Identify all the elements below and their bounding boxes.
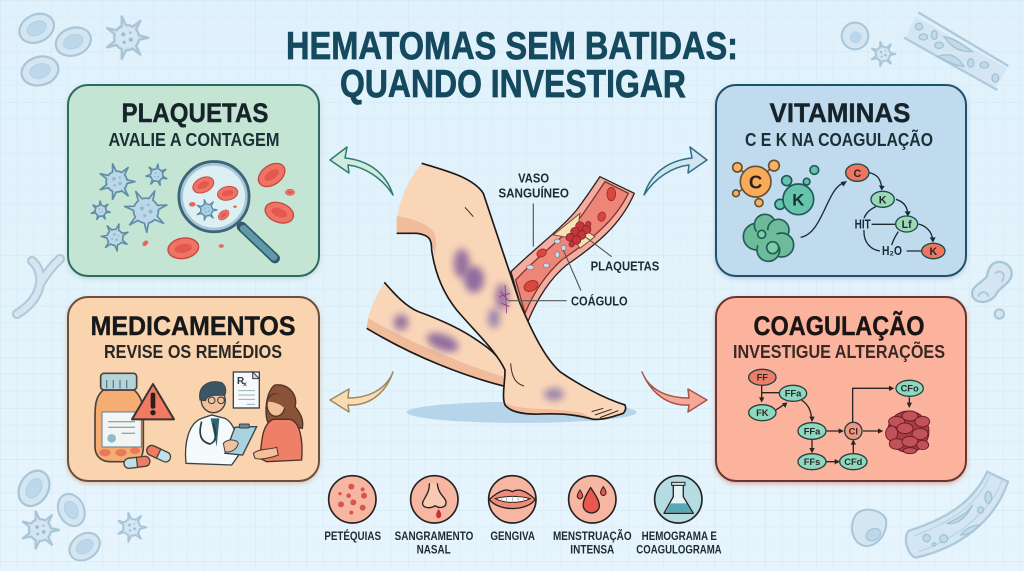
decoration: top-left blood cells (15, 8, 148, 90)
subheading: c e k na coagulacao: C E K NA COAGULAÇÃO (745, 129, 933, 150)
icon: doctor and patient: R (237, 376, 244, 387)
arrow: to medicamentos (330, 372, 393, 412)
back leg (367, 282, 505, 386)
blood vessel (511, 177, 634, 322)
decoration: right cell (972, 262, 1012, 319)
labels: symptoms: NASAL (417, 542, 451, 556)
label: plaquetas: PLAQUETAS (591, 259, 659, 273)
chart: vitamin molecules and pathway: K (879, 194, 887, 206)
panel: plaquetas (68, 85, 319, 278)
chart: coagulation cascade: FF (757, 373, 768, 383)
decoration: left branching vessel (17, 259, 60, 314)
heading: coagulacao: COAGULAÇÃO (754, 310, 924, 341)
labels: symptoms: COAGULOGRAMA (636, 542, 722, 556)
chart: vitamin molecules and pathway: H₂O (882, 244, 902, 258)
subheading: revise os remedios: REVISE OS REMÉDIOS (104, 341, 282, 362)
chart: coagulation cascade (749, 369, 930, 470)
title: QUANDO INVESTIGAR (340, 63, 686, 106)
icon: petequias (329, 476, 376, 523)
labels: symptoms: PETÉQUIAS (324, 528, 381, 543)
chart: vitamin molecules and pathway: C (853, 168, 861, 180)
title (286, 25, 738, 106)
heading: vitaminas: VITAMINAS (770, 98, 910, 128)
icon: gengiva (489, 476, 536, 523)
label: coagulo: COÁGULO (571, 294, 628, 309)
icon: platelets and magnifying glass (91, 159, 296, 261)
heading: plaquetas: PLAQUETAS (122, 98, 268, 128)
symptom icons row (324, 476, 722, 556)
labels: symptoms: MENSTRUAÇÃO (553, 528, 632, 543)
icon: sangramento nasal (411, 476, 458, 523)
title: HEMATOMAS SEM BATIDAS: (286, 25, 738, 68)
icon: doctor and patient: x (243, 381, 247, 388)
chart: vitamin molecules and pathway: K (929, 246, 937, 258)
icon: exame flask (655, 476, 702, 523)
subheading: investigue alteracoes: INVESTIGUE ALTERAÇÕES (733, 341, 945, 362)
chart: vitamin molecules and pathway: HIT (855, 218, 871, 232)
callout lines (508, 203, 612, 301)
decoration: bottom-left cells (12, 465, 146, 566)
panel: coagulacao (716, 297, 966, 483)
front leg (396, 163, 626, 419)
chart: vitamin molecules and pathway: K (792, 190, 804, 209)
labels: symptoms: INTENSA (570, 542, 614, 556)
chart: coagulation cascade: FFs (804, 457, 820, 467)
panel: medicamentos (68, 297, 319, 483)
icon: medicine bottle, warning, pills (95, 373, 174, 469)
labels: symptoms: GENGIVA (490, 529, 535, 543)
panel: vitaminas (716, 85, 966, 278)
decoration: bottom-right cell and vessel (852, 472, 1008, 558)
chart: coagulation cascade: Cl (849, 426, 858, 436)
chart: vitamin molecules and pathway: Lf (902, 219, 912, 231)
chart: coagulation cascade: CFd (844, 457, 863, 467)
icon: menstruacao (569, 476, 616, 523)
labels: symptoms (324, 528, 722, 556)
arrow: to coagulacao (642, 372, 707, 412)
label: vaso sanguineo: SANGUÍNEO (498, 186, 569, 201)
chart: coagulation cascade: FK (756, 408, 769, 418)
floor shadow (407, 402, 637, 423)
label: vaso sanguineo (498, 171, 569, 201)
chart: vitamin molecules and pathway: C (749, 171, 762, 192)
labels: symptoms: HEMOGRAMA E (642, 529, 717, 543)
decoration: top-right cells and vessel (842, 12, 1008, 90)
chart: coagulation cascade: FFa (785, 389, 802, 399)
arrow: to vitaminas (644, 147, 707, 195)
chart: coagulation cascade: FFa (804, 426, 821, 436)
label: vaso sanguineo: VASO (518, 171, 549, 185)
chart: vitamin molecules and pathway (733, 160, 945, 261)
icon: doctor and patient (186, 372, 303, 465)
chart: coagulation cascade: CFo (901, 384, 919, 394)
arrow: to plaquetas (330, 147, 393, 195)
heading: medicamentos: MEDICAMENTOS (90, 311, 296, 341)
illustration: legs and blood vessel (367, 163, 659, 423)
subheading: avalie a contagem: AVALIE A CONTAGEM (108, 130, 280, 150)
labels: symptoms: SANGRAMENTO (395, 529, 474, 543)
